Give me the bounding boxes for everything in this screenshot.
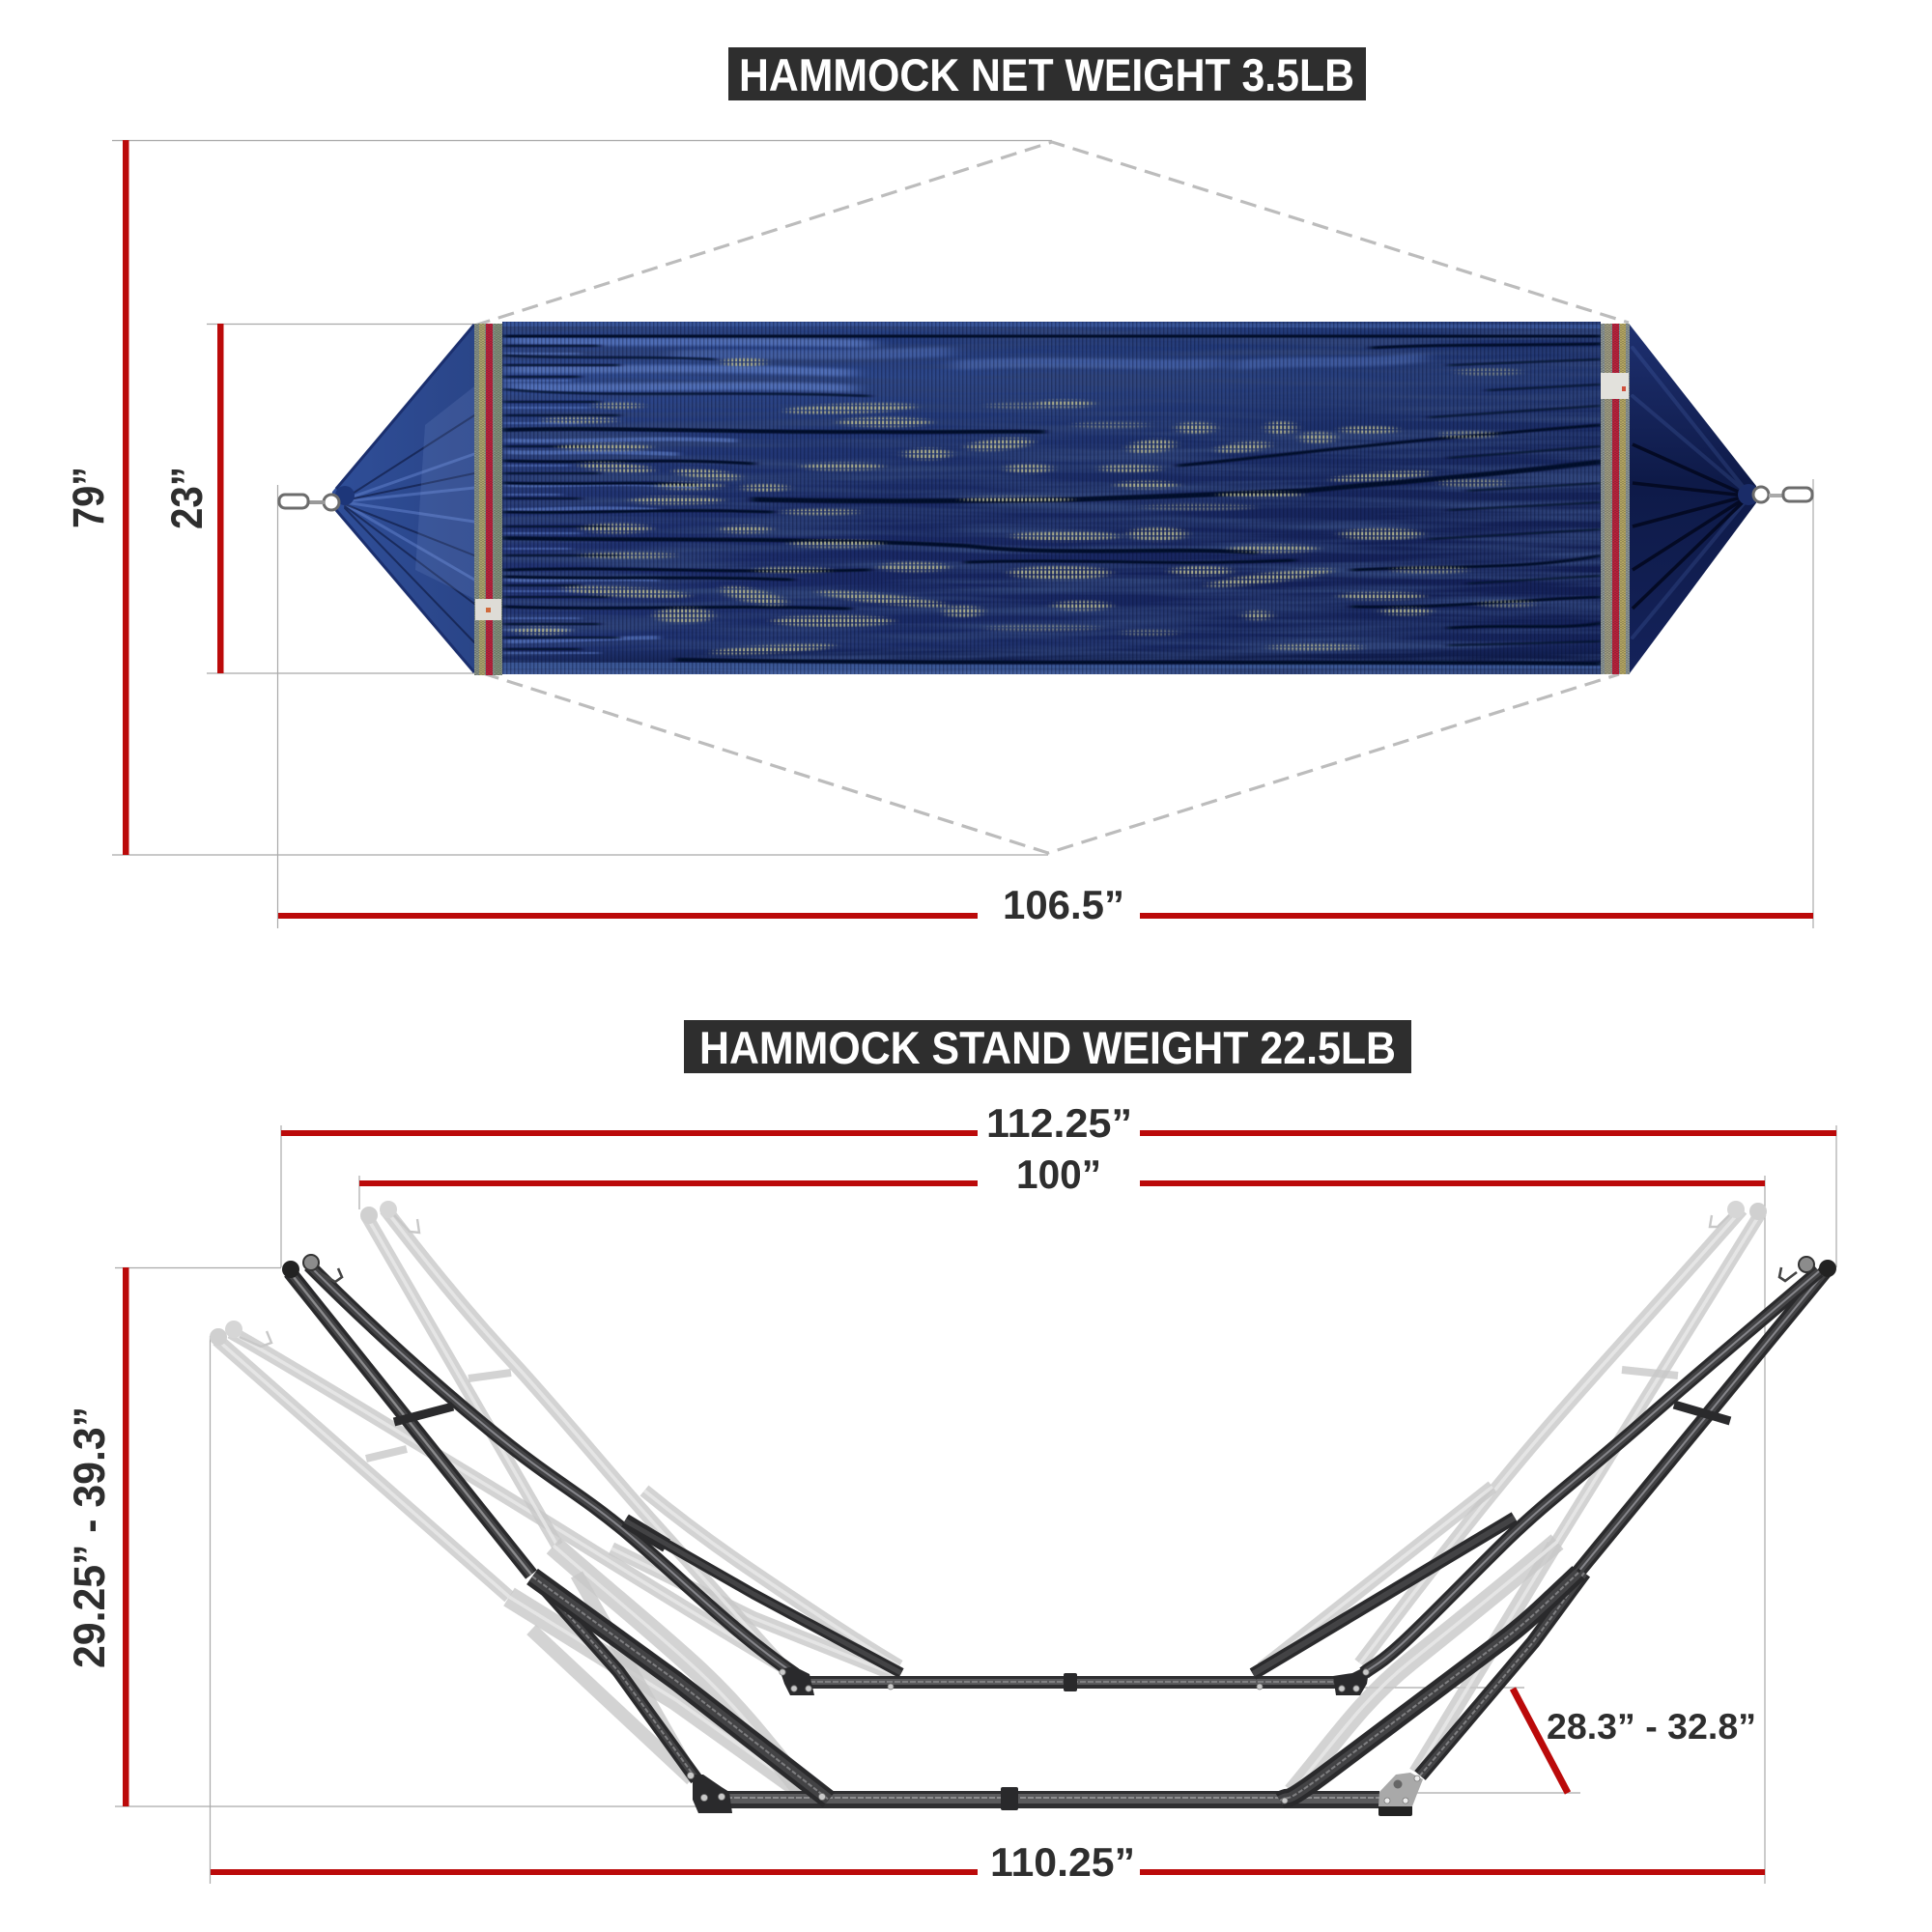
left stand arms bbox=[282, 1255, 901, 1800]
dimension: stand height range bbox=[65, 1267, 129, 1806]
ghost stand: lowered left position bbox=[210, 1321, 898, 1797]
guide lines for hammock bbox=[112, 141, 1813, 928]
dimension: 106.5 inch bbox=[278, 882, 1813, 927]
lower right silver joint bbox=[1282, 1773, 1423, 1816]
dimension: inner width range: 28.3” - 32.8” bbox=[1547, 1707, 1756, 1747]
ghost stand: raised right position bbox=[1262, 1201, 1767, 1792]
dimension: 23 inch bbox=[162, 324, 224, 673]
dimension: 79 inch bbox=[64, 140, 129, 855]
title: hammock stand weight: HAMMOCK STAND WEIGHT 22.5LB bbox=[699, 1022, 1396, 1073]
left ring and link bbox=[279, 486, 355, 510]
panel: hammock net diagram bbox=[64, 140, 1813, 928]
dimension: 100 inch: 100” bbox=[1016, 1151, 1101, 1197]
right hammock webbing band bbox=[1601, 324, 1630, 674]
dimension: 110.25 inch bbox=[211, 1839, 1765, 1885]
upper crossbar bbox=[810, 1673, 1337, 1691]
hammock main body bbox=[502, 322, 1601, 674]
right ring and link bbox=[1738, 484, 1812, 505]
dimension: 100 inch bbox=[359, 1151, 1765, 1197]
dimension: inner width range bbox=[1513, 1689, 1756, 1793]
hammock right end triangle bbox=[1630, 325, 1758, 673]
dimension: stand height range: 29.25” - 39.3” bbox=[65, 1406, 114, 1668]
dimension: 23 inch: 23” bbox=[162, 467, 212, 529]
title: hammock net weight: HAMMOCK NET WEIGHT 3.5LB bbox=[739, 49, 1354, 100]
hammock highlights bbox=[502, 325, 1601, 666]
dimension: 110.25 inch: 110.25” bbox=[990, 1839, 1135, 1885]
dimension: 112.25 inch: 112.25” bbox=[986, 1100, 1132, 1146]
upper right joint bbox=[1257, 1668, 1369, 1695]
lower crossbar bbox=[726, 1787, 1379, 1810]
stand guide lines bbox=[115, 1125, 1836, 1884]
hammock left end triangle bbox=[330, 325, 474, 672]
hammock pleats bbox=[504, 335, 1601, 664]
left hammock webbing band bbox=[474, 324, 502, 675]
hammock mesh patches bbox=[507, 355, 1540, 656]
lower left joint bbox=[688, 1772, 825, 1813]
panel: hammock stand diagram bbox=[65, 1100, 1836, 1885]
right stand arms bbox=[1253, 1257, 1836, 1801]
ghost stand: raised left position bbox=[360, 1201, 899, 1795]
dimension: 79 inch: 79” bbox=[64, 467, 113, 528]
dimension: 106.5 inch: 106.5” bbox=[1003, 882, 1124, 927]
dimension: 112.25 inch bbox=[281, 1100, 1836, 1146]
upper left joint bbox=[780, 1666, 894, 1695]
